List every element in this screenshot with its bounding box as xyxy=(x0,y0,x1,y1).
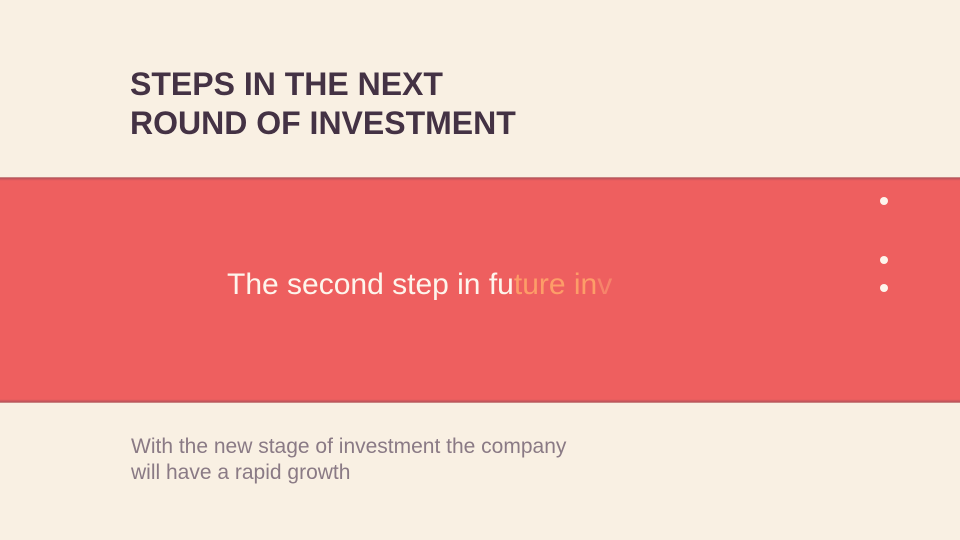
animated sentence: The second step in future inv xyxy=(227,268,612,301)
icon: dot top xyxy=(880,197,888,205)
title: ROUND OF INVESTMENT xyxy=(130,105,516,141)
title: STEPS IN THE NEXT xyxy=(130,66,443,102)
body text xyxy=(131,435,566,484)
body text: will have a rapid growth xyxy=(131,461,350,484)
body text: With the new stage of investment the company xyxy=(131,435,566,458)
icon: dot bottom xyxy=(880,284,888,292)
title xyxy=(130,66,516,141)
panel: red band xyxy=(0,177,960,403)
icon: dot middle xyxy=(880,256,888,264)
